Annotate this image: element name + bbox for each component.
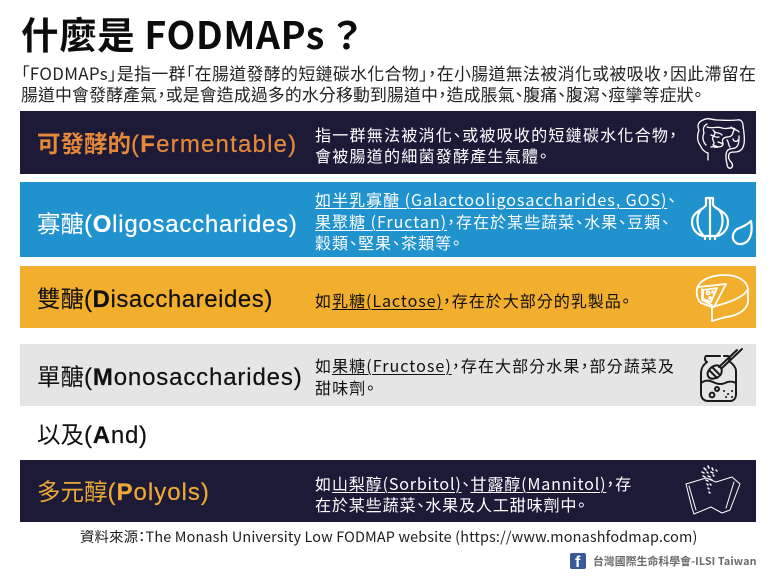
intro text [21,60,756,106]
source note: 資料來源：The Monash University Low FODMAP website (https://www.monashfodmap.com) [80,526,697,547]
text: monosaccharides description: 如果糖(Fructose)，存在大部分水果，部分蔬菜及 [315,353,675,377]
text: monosaccharides description: 甜味劑。 [315,375,375,399]
text: oligosaccharides description: 如半乳寡醣 (Galactooligosaccharides, GOS)、 [315,187,676,211]
icon: honey jar [700,348,743,402]
icon: sweetener packet [686,465,740,514]
text: oligosaccharides description: 果聚糖 (Fructan)，存在於某些蔬菜、水果、豆類、 [315,208,670,232]
intro text: 「FODMAPs」是指一群「在腸道發酵的短鏈碳水化合物」，在小腸道無法被消化或被吸收，因此滯留在 [21,60,756,85]
text: fermentable description: 會被腸道的細菌發酵產生氣體。 [315,142,548,166]
text: disaccharides description: 如乳糖(Lactose)，存在於大部分的乳製品。 [315,288,631,312]
panel: monosaccharides [20,344,756,406]
icon: garlic and drop [690,196,753,246]
panel: disaccharides [20,266,756,328]
text: fermentable description: 指一群無法被消化、或被吸收的短鏈碳水化合物， [315,122,678,146]
icon: facebook [570,553,586,569]
text: polyols description: 如山梨醇(Sorbitol)、甘露醇(Mannitol)，存 [315,471,632,495]
text: oligosaccharides description: 穀類、堅果、茶類等。 [315,230,461,254]
title: 什麼是 FODMAPs ？ [21,5,361,60]
heading: fermentable: 可發酵的(Fermentable) [37,125,297,159]
icon: intestines [696,118,745,169]
text: and: 以及(And) [37,416,148,450]
text: monosaccharides description [315,353,675,399]
panel: fermentable [20,111,756,174]
panel: polyols [20,460,756,522]
heading: oligosaccharides: 寡醣(Oligosaccharides) [37,205,298,239]
panel: oligosaccharides [20,182,756,257]
text: polyols description: 在於某些蔬菜、水果及人工甜味劑中。 [315,492,586,516]
heading: polyols: 多元醇(Polyols) [37,473,210,507]
text: oligosaccharides description [315,187,676,254]
intro text: 腸道中會發酵產氣，或是會造成過多的水分移動到腸道中，造成脹氣、腹痛、腹瀉、痙攣等症狀。 [21,81,702,106]
text: fermentable description [315,122,678,166]
text: polyols description [315,471,632,516]
heading: monosaccharides: 單醣(Monosaccharides) [37,358,303,392]
icon: cheese [696,274,749,322]
credit: 台灣國際生命科學會-ILSI Taiwan [593,553,757,569]
heading: disaccharides: 雙醣(Disacchareides) [37,280,273,314]
